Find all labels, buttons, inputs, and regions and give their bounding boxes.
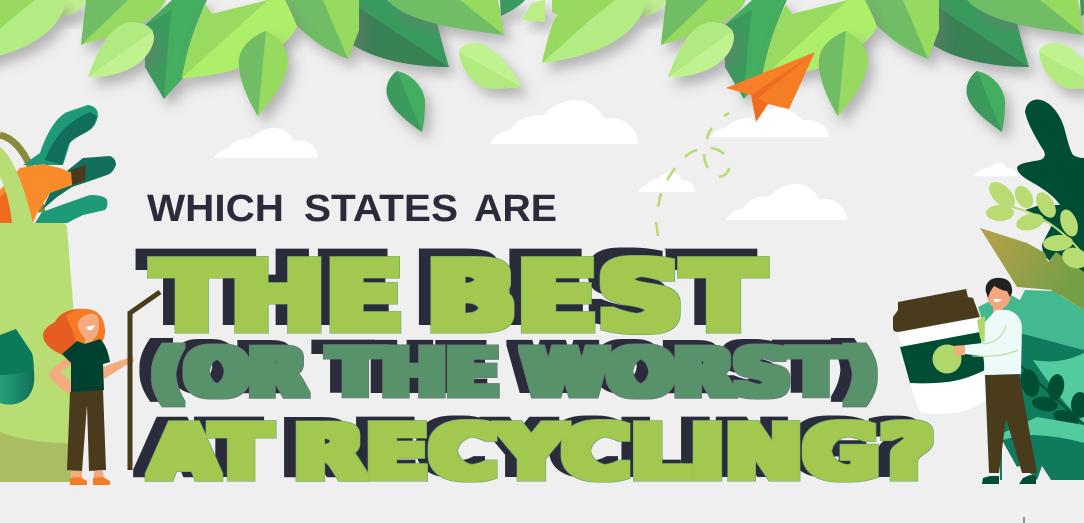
dark sprig — [1018, 365, 1084, 429]
carrot — [0, 164, 72, 223]
illustration: woman — [43, 309, 134, 485]
headline: the best: THE — [153, 243, 403, 352]
face — [987, 279, 1011, 309]
hand — [953, 345, 965, 356]
headline: or the worst: WORST) — [522, 334, 878, 412]
sprig — [984, 177, 1084, 272]
heading: which states are: ARE — [474, 188, 557, 230]
cup logo — [932, 344, 962, 374]
feet — [70, 471, 110, 484]
heading: which states are: STATES — [304, 188, 458, 230]
light palm band — [1003, 417, 1084, 443]
leaf: pale right — [459, 43, 522, 89]
leaf: large pale — [0, 0, 66, 63]
neck — [993, 300, 1003, 314]
illustration: right foliage — [978, 100, 1084, 500]
leaf: dark slim — [145, 0, 207, 99]
sign pole — [130, 292, 160, 470]
headline: or the worst: THE — [329, 334, 499, 412]
illustration: man — [953, 278, 1037, 484]
headline: the best — [153, 243, 764, 352]
bag leaf emblem — [0, 329, 34, 405]
headline: or the worst: (OR — [151, 334, 306, 412]
headline: at recycling — [150, 410, 934, 496]
clouds — [214, 100, 1017, 220]
smile — [993, 299, 1002, 302]
heading: which states are: WHICH — [147, 188, 284, 230]
icon: paper plane — [726, 52, 815, 122]
hair — [43, 309, 105, 355]
leaf: small falling — [387, 71, 425, 132]
shirt — [62, 339, 110, 392]
carrot end — [71, 165, 86, 185]
heading: which states are — [147, 188, 557, 230]
left arm — [49, 356, 79, 400]
leaf: bright — [182, 0, 297, 78]
leaf: dark wide — [353, 0, 449, 67]
legs — [67, 389, 106, 471]
carrot leaf top — [23, 105, 98, 165]
leaf canopy: right cluster — [542, 0, 1084, 132]
leaf: hanging centre — [239, 31, 288, 116]
leaf: two tone upper — [81, 0, 166, 45]
headline: or the worst — [151, 334, 878, 412]
teal palm leaf — [978, 290, 1084, 350]
trousers — [985, 374, 1037, 473]
illustration: bag with vegetables — [0, 105, 116, 482]
tick mark — [1024, 517, 1025, 523]
carrot leaf lower — [35, 195, 107, 223]
right arm — [103, 356, 134, 379]
dashed flight path — [656, 113, 729, 254]
bag handle — [0, 147, 33, 223]
dark oak leaf — [1017, 100, 1084, 277]
torso — [984, 310, 1022, 375]
headline: at recycling: RECYCLING? — [293, 410, 934, 496]
carrot leaf middle — [42, 156, 116, 210]
olive leaf — [980, 228, 1084, 310]
face — [78, 314, 99, 340]
shoes — [982, 475, 1036, 484]
leaf: pale small — [88, 22, 154, 77]
headline: the best: BEST — [426, 243, 764, 352]
illustration: coffee cup — [893, 289, 986, 414]
cup lid — [893, 289, 980, 332]
bag body — [0, 223, 82, 482]
arm — [965, 322, 1021, 357]
light palm section — [1033, 353, 1084, 423]
leaf: top right — [387, 0, 504, 35]
bag base — [0, 432, 76, 482]
cup band — [900, 332, 985, 383]
smile — [86, 325, 95, 330]
hair — [986, 278, 1012, 298]
leaf canopy: left cluster — [0, 0, 545, 132]
headline: at recycling: AT — [150, 410, 271, 496]
leaf: centre medium — [277, 0, 359, 59]
